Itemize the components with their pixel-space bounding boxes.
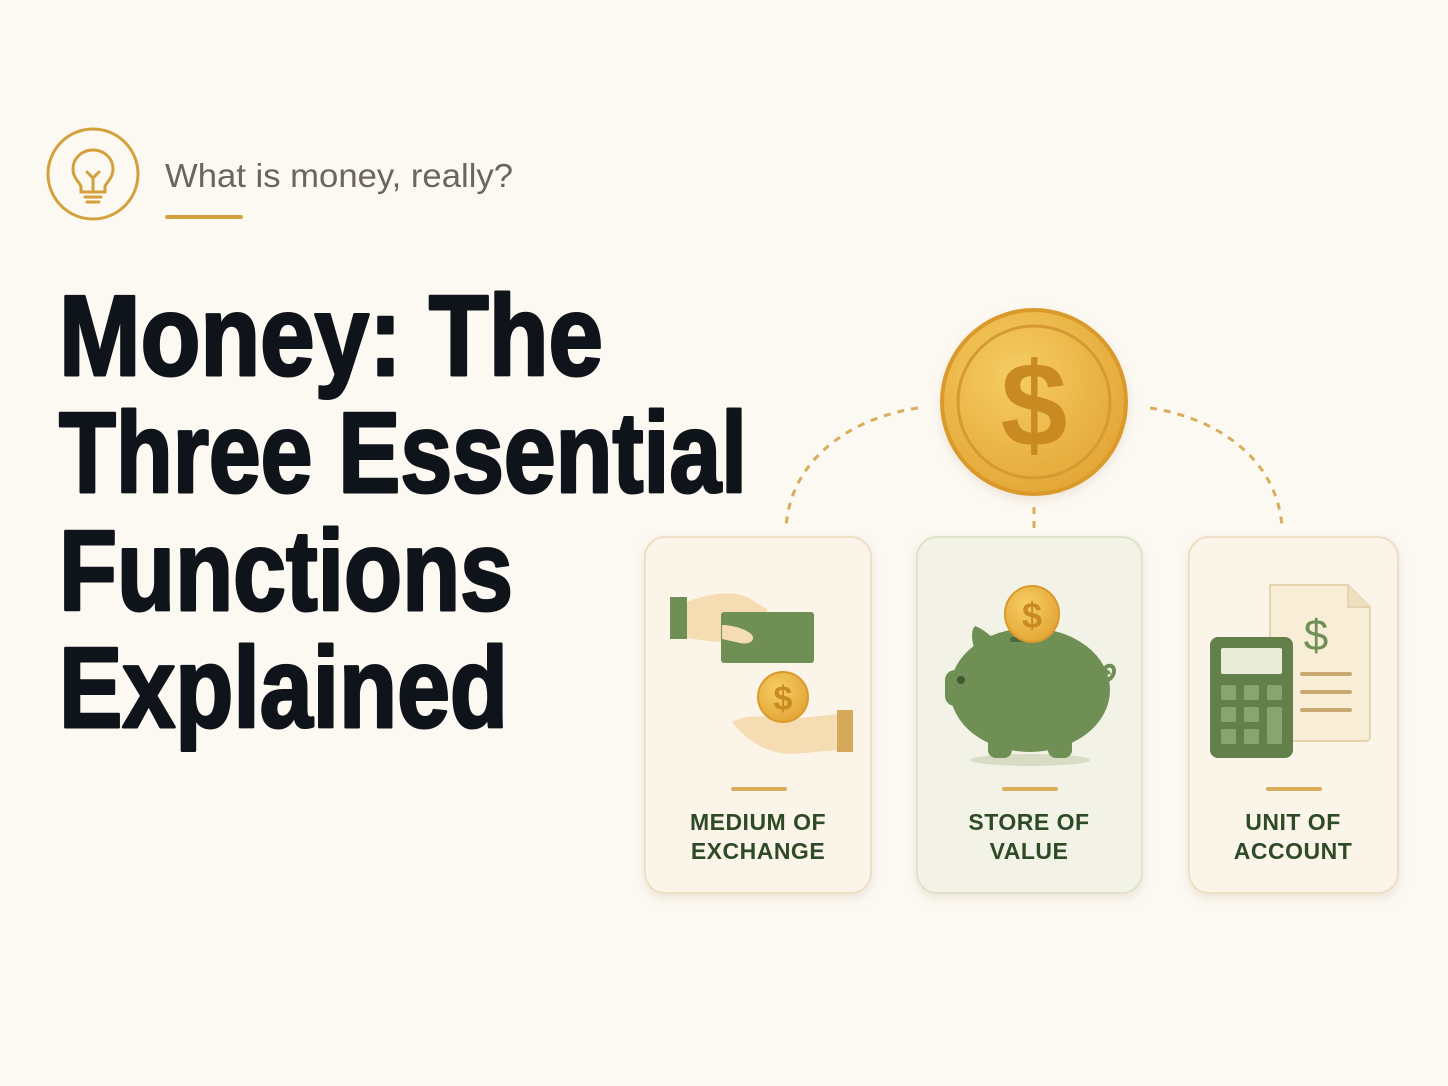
panel: unit of account: ACCOUNT: [1234, 838, 1352, 864]
icon: hands exchanging: [670, 593, 853, 754]
label: STORE OF: [968, 809, 1090, 835]
panel: medium of exchange: EXCHANGE: [691, 838, 825, 864]
label: MEDIUM OF: [690, 809, 826, 835]
icon: piggy bank: [945, 586, 1114, 766]
icon: gold coin: [942, 310, 1126, 494]
label: UNIT OF: [1245, 809, 1341, 835]
connectors: [786, 408, 1282, 528]
icon: calculator and receipt: [1210, 585, 1370, 758]
subtitle underline: [165, 215, 243, 219]
title: Three Essential: [59, 390, 747, 517]
panel: store of value: VALUE: [990, 838, 1068, 864]
title: Explained: [59, 625, 508, 752]
title: Functions: [59, 508, 513, 635]
panel: store of value: [917, 537, 1142, 893]
panel: unit of account: [1189, 537, 1398, 893]
icon: lightbulb circle: [48, 129, 138, 219]
icon: gold coin: $: [1001, 338, 1067, 472]
panel: medium of exchange: [645, 537, 871, 893]
title: Money: The: [59, 273, 603, 400]
title: [59, 273, 747, 752]
icon: calculator and receipt: $: [1304, 611, 1328, 660]
subtitle: What is money, really?: [165, 157, 513, 194]
icon: hands exchanging: $: [774, 680, 793, 718]
icon: piggy bank: $: [1022, 595, 1042, 636]
